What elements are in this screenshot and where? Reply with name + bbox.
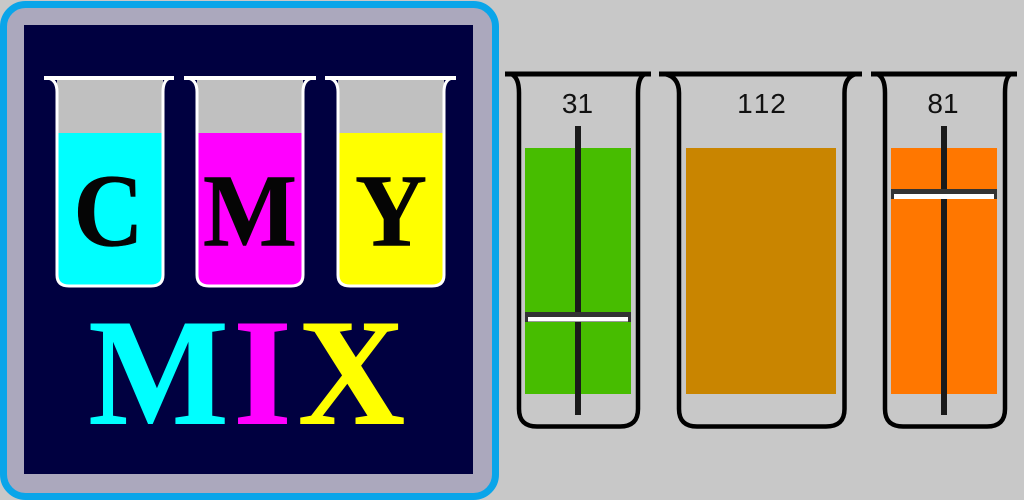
slider handle: [891, 189, 997, 199]
beaker outline: [871, 74, 1017, 426]
icon: magenta beaker with M: [184, 78, 316, 287]
panel: logo: [4, 4, 496, 496]
orange liquid: [891, 148, 997, 394]
green liquid: [525, 148, 631, 394]
mixed liquid: [686, 148, 836, 394]
title: MIX: I: [234, 288, 292, 456]
panel: mixed colour beaker: [659, 74, 862, 426]
panel: green beaker slider: [505, 74, 651, 426]
title: MIX: X: [298, 288, 405, 456]
slider track: [575, 126, 581, 415]
value 31: 31: [562, 88, 593, 119]
icon: yellow beaker with Y: [325, 78, 456, 287]
title: MIX: M: [88, 288, 228, 456]
title: MIX: [88, 288, 405, 456]
beaker outline: [659, 74, 862, 426]
panel: orange beaker slider: [871, 74, 1017, 426]
icon: yellow beaker with Y: Y: [355, 154, 427, 268]
value 112: 112: [737, 88, 787, 119]
beaker outline: [505, 74, 651, 426]
icon: magenta beaker with M: M: [203, 154, 297, 268]
icon: cyan beaker with C: [44, 78, 174, 287]
icon: cyan beaker with C: C: [74, 154, 144, 268]
value 81: 81: [927, 88, 959, 119]
slider track: [941, 126, 947, 415]
slider handle: [525, 312, 631, 322]
